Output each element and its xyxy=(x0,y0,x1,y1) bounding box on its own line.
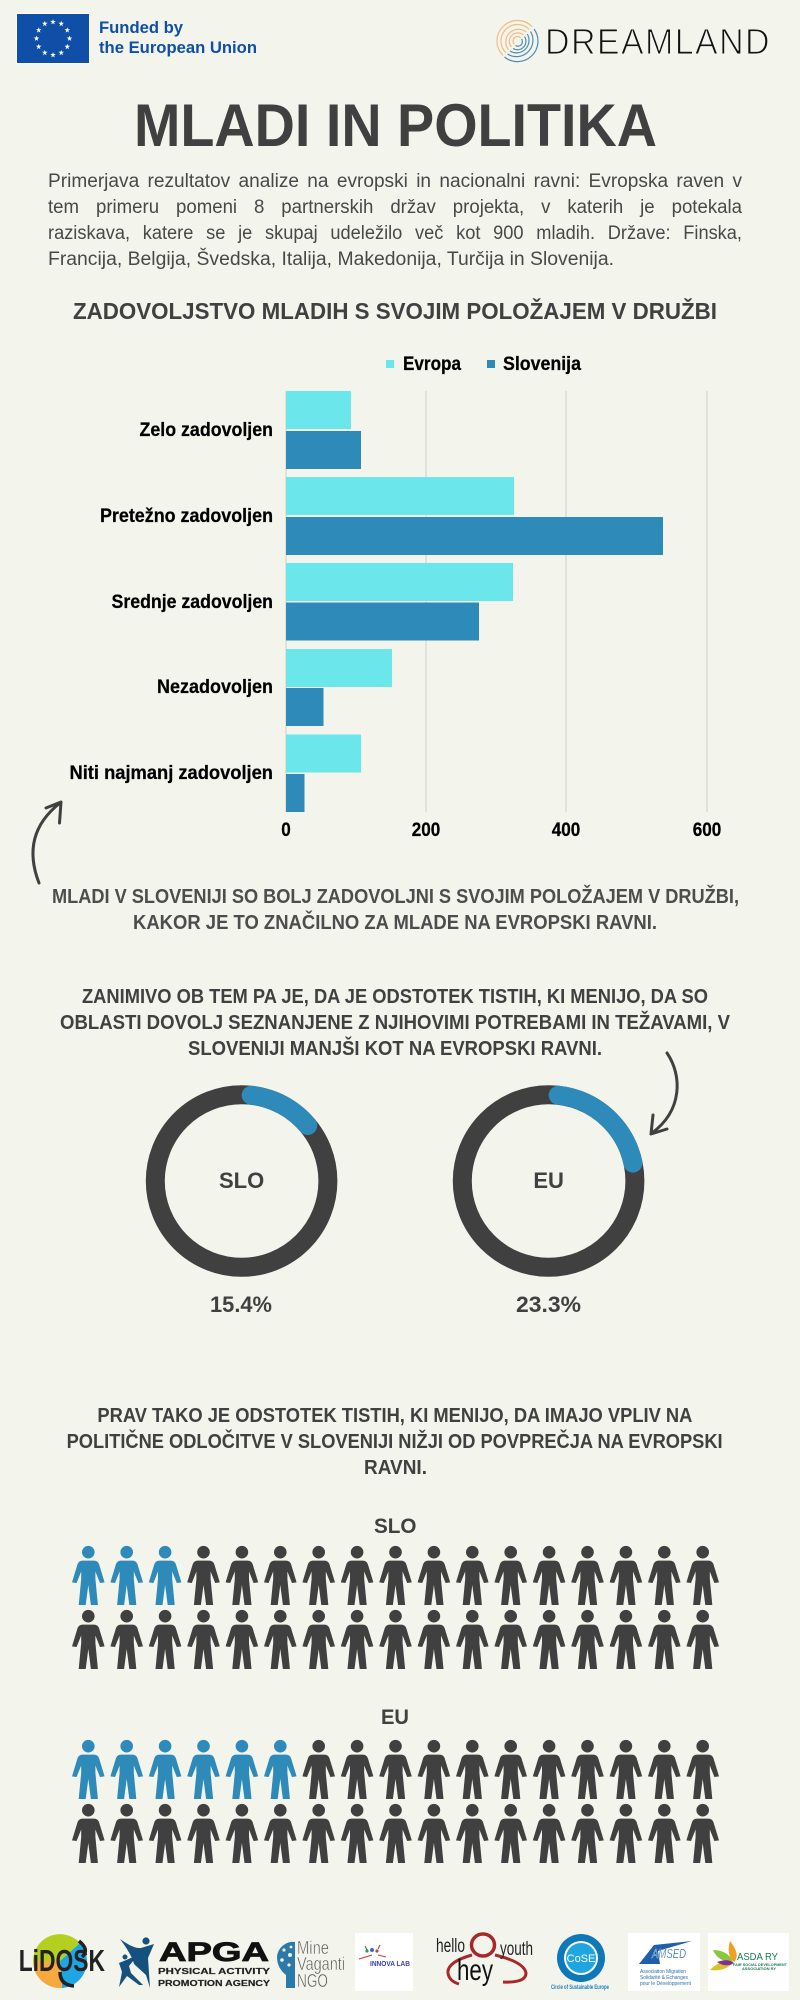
logo: APGA xyxy=(119,1937,270,1988)
SLO row 2 xyxy=(72,1610,719,1669)
logo: LiDOSK: LiDOSK xyxy=(19,1943,105,1978)
x axis labels: 400 xyxy=(552,820,580,841)
chart legend xyxy=(386,354,581,375)
SLO row 1 xyxy=(72,1546,719,1605)
finding text: awareness of needs: SLOVENIJI MANJŠI KOT NA EVROPSKI RAVNI. xyxy=(188,1036,602,1060)
logo: AMSED: Solidarité & Echanges xyxy=(640,1975,688,1981)
logo: Mine Vaganti NGO: NGO xyxy=(297,1971,328,1991)
bars: Zelo zadovoljen: Zelo zadovoljen xyxy=(140,420,273,441)
logo: APGA: PHYSICAL ACTIVITY xyxy=(158,1966,270,1976)
logo: funded by the European Union: the European Union xyxy=(99,38,257,57)
logo: AMSED: Association Migration xyxy=(640,1969,686,1975)
logo: LiDOSK xyxy=(19,1934,105,1988)
x axis labels: 0 xyxy=(281,820,291,841)
logo: Dreamland: DREAMLAND xyxy=(545,21,771,62)
logo: Mine Vaganti NGO: Mine xyxy=(297,1938,329,1958)
finding text: awareness of needs: ZANIMIVO OB TEM PA JE, DA JE ODSTOTEK TISTIH, KI MENIJO, DA SO xyxy=(82,985,708,1008)
intro paragraph xyxy=(48,171,742,270)
finding text: influence on decisions xyxy=(67,1404,723,1479)
pictogram: EU people xyxy=(72,1740,719,1863)
pictogram: SLO people xyxy=(72,1546,719,1669)
donut: EU 23.3% xyxy=(462,1095,635,1317)
logo: APGA: APGA xyxy=(159,1937,269,1967)
pictogram label: EU: EU xyxy=(381,1706,409,1729)
logo: hello youth hey: hello xyxy=(436,1936,465,1957)
logo: ASDA RY xyxy=(708,1933,789,1991)
finding text: awareness of needs: OBLASTI DOVOLJ SEZNANJENE Z NJIHOVIMI POTREBAMI IN TEŽAVAMI, V xyxy=(60,1010,730,1034)
donut: EU 23.3%: EU xyxy=(533,1168,564,1193)
logo: AMSED xyxy=(628,1933,700,1991)
chart legend: Slovenija xyxy=(503,354,581,375)
logo: Mine Vaganti NGO: Vaganti xyxy=(297,1954,345,1974)
bars: Nezadovoljen: Nezadovoljen xyxy=(157,677,273,698)
EU row 2 xyxy=(72,1804,719,1863)
pictogram label: SLO: SLO xyxy=(374,1515,416,1538)
logo: AMSED: pour le Développement xyxy=(640,1981,691,1987)
bars: Nezadovoljen xyxy=(157,649,392,726)
bars: Pretežno zadovoljen xyxy=(100,477,663,555)
finding text: Slovenia more satisfied: KAKOR JE TO ZNAČILNO ZA MLADE NA EVROPSKI RAVNI. xyxy=(133,910,657,934)
bars: Zelo zadovoljen xyxy=(140,391,361,469)
EU row 1 xyxy=(72,1740,719,1799)
finding text: awareness of needs xyxy=(60,985,730,1060)
logo: ASDA RY: ASDA RY xyxy=(737,1952,778,1963)
chart legend: Evropa xyxy=(403,354,461,375)
x axis labels: 600 xyxy=(693,820,721,841)
bar chart: satisfaction xyxy=(70,354,721,841)
arrow: up to chart xyxy=(33,802,61,883)
bars: Srednje zadovoljen: Srednje zadovoljen xyxy=(112,592,273,613)
logo: Mine Vaganti NGO xyxy=(277,1938,345,1991)
bars: Pretežno zadovoljen: Pretežno zadovoljen xyxy=(100,506,273,527)
intro paragraph: tem primeru pomeni 8 partnerskih držav projekta, v katerih je potekala xyxy=(48,197,742,218)
x axis labels: 200 xyxy=(412,820,440,841)
finding text: Slovenia more satisfied xyxy=(52,884,739,934)
logo: APGA: PROMOTION AGENCY xyxy=(158,1978,270,1988)
title: MLADI IN POLITIKA xyxy=(134,92,657,159)
intro paragraph: Primerjava rezultatov analize na evropski in nacionalni ravni: Evropska raven v xyxy=(48,171,742,192)
intro paragraph: raziskava, katere se je skupaj udeležilo več kot 900 mladih. Države: Finska, xyxy=(48,223,742,244)
donut: SLO 15.4% xyxy=(155,1095,328,1317)
logo: hello youth hey xyxy=(436,1934,533,1987)
arrow: down to EU donut xyxy=(651,1053,677,1134)
logo: hello youth hey: hey xyxy=(457,1954,493,1987)
donut: EU 23.3%: 23.3% xyxy=(516,1292,581,1317)
logo: ASDA RY: FAIR SOCIAL DEVELOPMENT xyxy=(733,1962,788,1967)
donut: SLO 15.4%: 15.4% xyxy=(210,1292,272,1317)
bars: Niti najmanj zadovoljen xyxy=(70,734,361,812)
logo: CoSE: Circle of Sustainable Europe xyxy=(551,1984,609,1991)
logo: Innova Lab: INNOVA LAB xyxy=(370,1961,410,1968)
bars: Niti najmanj zadovoljen: Niti najmanj zadovoljen xyxy=(70,763,273,784)
logo: funded by the European Union: Funded by xyxy=(99,18,184,37)
bars: Srednje zadovoljen xyxy=(112,563,513,640)
logo: Innova Lab xyxy=(355,1933,413,1991)
chart heading: ZADOVOLJSTVO MLADIH S SVOJIM POLOŽAJEM V DRUŽBI xyxy=(73,297,717,324)
logo: ASDA RY: ASSOCIATION RY xyxy=(742,1966,776,1971)
finding text: influence on decisions: POLITIČNE ODLOČITVE V SLOVENIJI NIŽJI OD POVPREČJA NA EVROPSKI xyxy=(67,1429,723,1453)
intro paragraph: Francija, Belgija, Švedska, Italija, Makedonija, Turčija in Slovenija. xyxy=(48,248,614,270)
finding text: influence on decisions: PRAV TAKO JE ODSTOTEK TISTIH, KI MENIJO, DA IMAJO VPLIV NA xyxy=(97,1404,693,1427)
logo: funded by the European Union xyxy=(16,14,257,64)
x axis labels xyxy=(281,820,721,841)
logo: hello youth hey: youth xyxy=(500,1939,533,1960)
logo: CoSE: CoSE xyxy=(567,1953,595,1965)
finding text: influence on decisions: RAVNI. xyxy=(364,1456,427,1479)
donut: SLO 15.4%: SLO xyxy=(219,1168,264,1193)
logo: CoSE xyxy=(551,1934,609,1991)
logo: AMSED: AMSED xyxy=(651,1946,686,1961)
